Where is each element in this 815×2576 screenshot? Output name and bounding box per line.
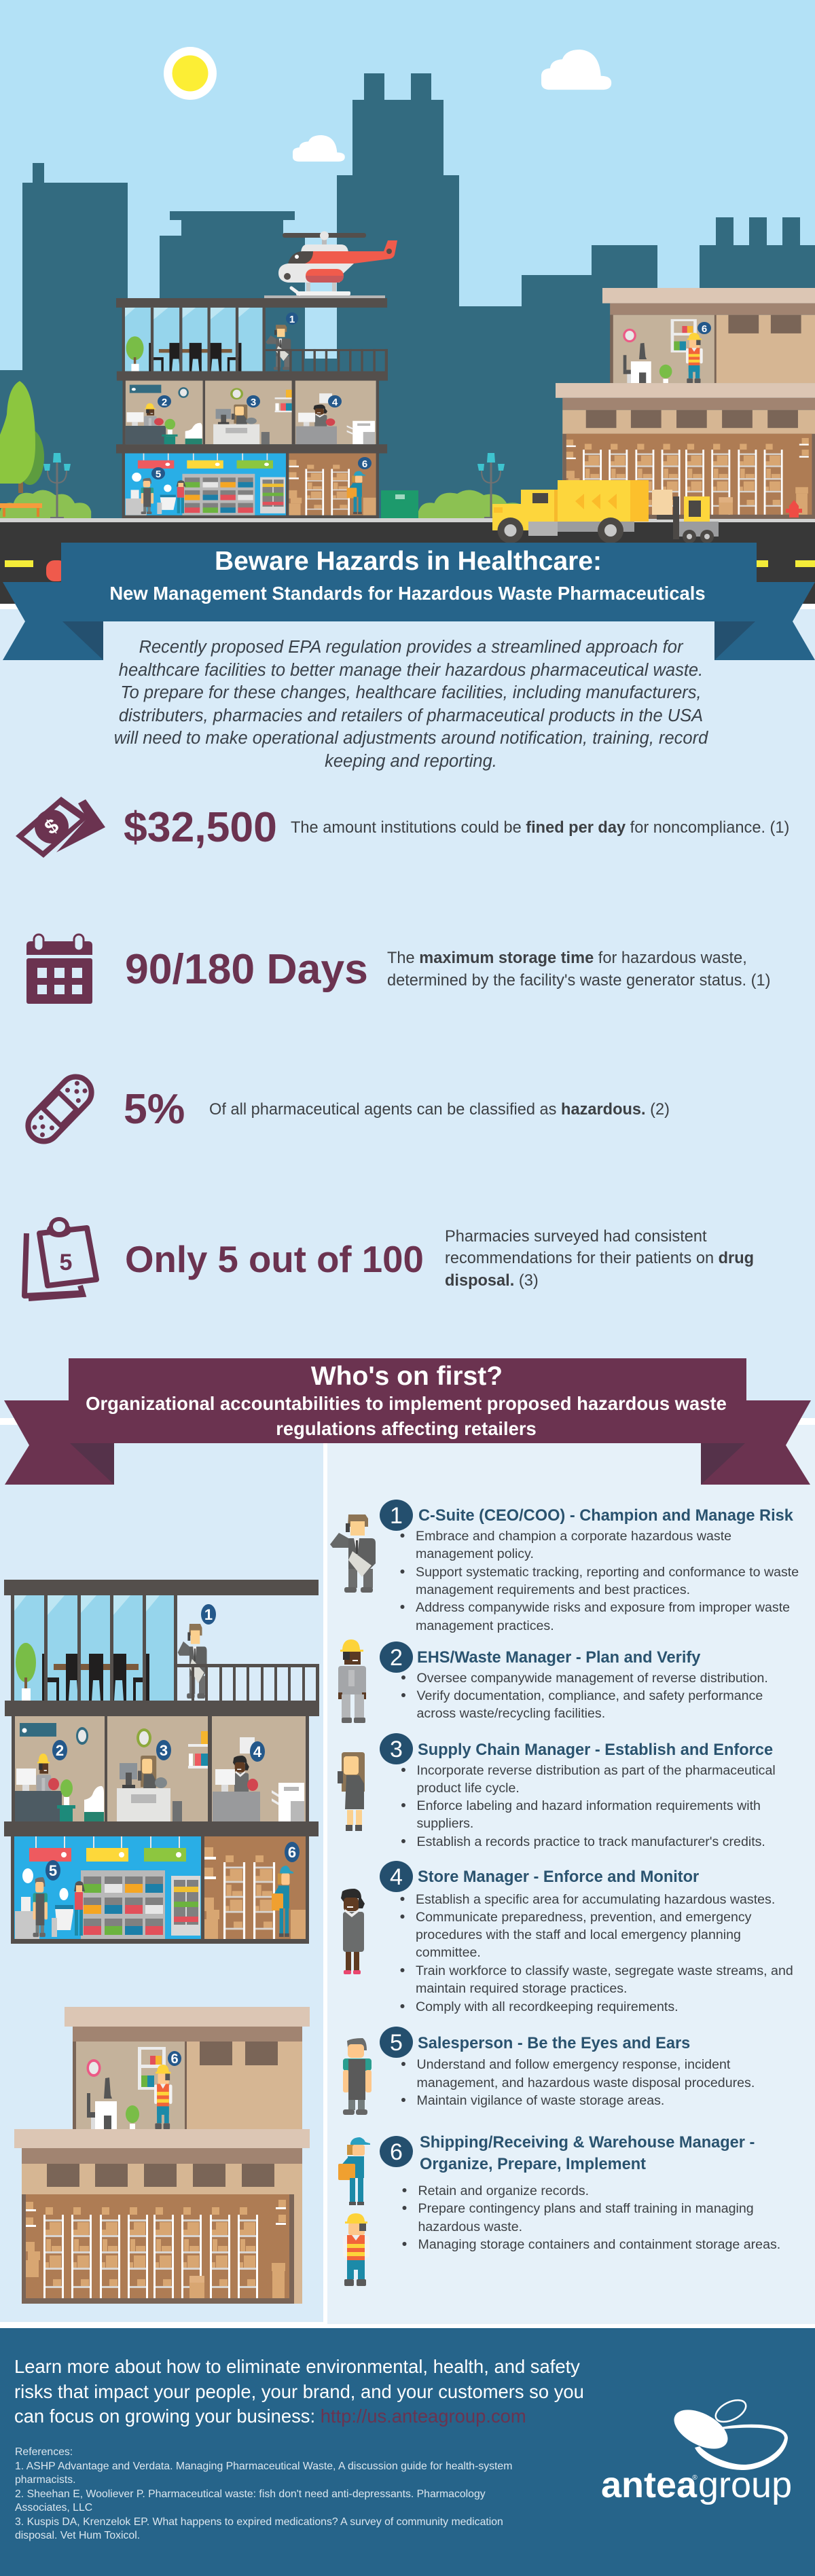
duties: Support systematic tracking, reporting and conformance to waste xyxy=(416,1565,799,1580)
dumpster xyxy=(381,490,418,518)
heading: Supply Chain Manager - Establish and Enforce xyxy=(418,1741,773,1759)
duties: Address companywide risks and exposure from improper waste xyxy=(416,1600,790,1615)
references xyxy=(15,2446,512,2541)
references: 3. Kuspis DA, Krenzelok EP. What happens to expired medications? A survey of community medication xyxy=(15,2516,503,2528)
warehouse number badge xyxy=(168,2051,181,2067)
street lamp right xyxy=(477,453,505,518)
duties: Oversee companywide management of reverse distribution. xyxy=(417,1671,768,1686)
logo: antea group: ® xyxy=(692,2474,698,2482)
heading xyxy=(420,2134,755,2173)
description xyxy=(445,1228,754,1290)
number 2 xyxy=(380,1641,413,1673)
stat: five of one hundred xyxy=(24,1219,754,1299)
value: Only 5 out of 100 xyxy=(125,1239,424,1280)
duties: Establish a specific area for accumulating hazardous wastes. xyxy=(416,1892,775,1907)
duties: Communicate preparedness, prevention, and emergency xyxy=(416,1910,752,1925)
duties: Retain and organize records. xyxy=(418,2183,589,2198)
number 3 xyxy=(380,1733,413,1764)
description: Pharmacies surveyed had consistent xyxy=(445,1228,707,1246)
heading: Organize, Prepare, Implement xyxy=(420,2156,646,2173)
figure: shipping clerk xyxy=(338,2137,370,2205)
number 6: 6 xyxy=(390,2139,403,2165)
delivery truck xyxy=(492,480,649,543)
heading: Salesperson - Be the Eyes and Ears xyxy=(418,2035,690,2052)
figure: woman on phone xyxy=(338,1752,365,1831)
stat: fine per day xyxy=(16,797,789,858)
office number badges xyxy=(46,1604,300,1881)
icon: calendar xyxy=(26,935,92,1004)
description: The maximum storage time for hazardous waste, xyxy=(387,949,747,967)
main title: Beware Hazards in Healthcare: xyxy=(215,547,602,576)
duties: management practices. xyxy=(416,1618,554,1633)
intro paragraph: distributers, pharmacies and retailers of pharmaceutical products in the USA xyxy=(119,706,703,725)
sun xyxy=(164,47,217,100)
map number badges: 6 xyxy=(362,458,367,470)
map number badges: 4 xyxy=(332,397,338,408)
heading: C-Suite (CEO/COO) - Champion and Manage Risk xyxy=(418,1507,794,1525)
logo: antea group: group xyxy=(698,2465,792,2505)
duties: management, and hazardous waste disposal procedures. xyxy=(417,2075,755,2090)
map number badges: 1 xyxy=(289,314,295,325)
duties: management policy. xyxy=(416,1546,534,1561)
bench xyxy=(0,503,42,517)
duties: management requirements and best practices. xyxy=(416,1582,690,1597)
heading: Store Manager - Enforce and Monitor xyxy=(418,1868,699,1886)
cloud small xyxy=(293,135,345,162)
map number badges xyxy=(151,312,711,480)
office number badges: 4 xyxy=(253,1743,262,1760)
role 4: Store Manager xyxy=(341,1861,793,2014)
office building cross-section xyxy=(4,1580,319,1944)
duties: Enforce labeling and hazard information requirements with xyxy=(417,1798,761,1813)
map number badges: 2 xyxy=(162,397,167,408)
references: 2. Sheehan E, Wooliever P. Pharmaceutical waste: fish don't need anti-depressants. Pharmacology xyxy=(15,2488,486,2500)
figure: warehouse worker xyxy=(343,2213,369,2286)
duties xyxy=(401,1671,768,1721)
office number badges: 3 xyxy=(160,1742,168,1759)
duties xyxy=(401,2057,755,2108)
references: Associates, LLC xyxy=(15,2502,92,2514)
duties xyxy=(401,1529,799,1633)
duties: Prepare contingency plans and staff training in managing xyxy=(418,2201,754,2216)
description: disposal. (3) xyxy=(445,1272,539,1290)
references: 1. ASHP Advantage and Verdata. Managing Pharmaceutical Waste, A discussion guide for health-system xyxy=(15,2461,512,2472)
stat: five percent xyxy=(22,1070,670,1148)
map number badges: 6 xyxy=(702,323,707,335)
street lamp left xyxy=(43,453,71,518)
call to action: risks that impact your people, your brand, and your customers so you xyxy=(14,2381,584,2402)
icon: bandage xyxy=(22,1070,98,1148)
bushes left xyxy=(0,490,91,518)
road xyxy=(0,518,815,609)
duties: hazardous waste. xyxy=(418,2219,522,2234)
call to action: Learn more about how to eliminate environmental, health, and safety xyxy=(14,2356,580,2377)
figure: hard hat manager xyxy=(338,1639,366,1723)
duties: Train workforce to classify waste, segregate waste streams, and xyxy=(416,1963,793,1978)
number 5: 5 xyxy=(390,2030,403,2056)
warehouse cross-section xyxy=(14,2007,310,2304)
references: disposal. Vet Hum Toxicol. xyxy=(15,2530,140,2541)
duties: Establish a records practice to track manufacturer's credits. xyxy=(417,1834,765,1849)
call to action xyxy=(14,2356,584,2427)
city skyline xyxy=(0,73,815,518)
role 6: Shipping/Receiving and Warehouse Manager xyxy=(338,2134,780,2286)
logo: antea group xyxy=(601,2396,792,2505)
heading: EHS/Waste Manager - Plan and Verify xyxy=(417,1649,700,1667)
references: pharmacists. xyxy=(15,2474,76,2486)
duties xyxy=(402,2183,780,2252)
references: References: xyxy=(15,2446,73,2458)
icon: pinned notes xyxy=(24,1219,96,1299)
description: The amount institutions could be fined per day for noncompliance. (1) xyxy=(291,819,789,837)
icon: banknotes xyxy=(16,797,105,858)
duties: suppliers. xyxy=(417,1816,473,1831)
intro paragraph: To prepare for these changes, healthcare facilities, including manufacturers, xyxy=(120,683,702,702)
duties: Incorporate reverse distribution as part of the pharmaceutical xyxy=(417,1763,776,1778)
subtitle: New Management Standards for Hazardous Waste Pharmaceuticals xyxy=(109,583,706,604)
office building xyxy=(116,298,388,518)
description xyxy=(387,949,770,990)
number 1: 1 xyxy=(390,1503,403,1529)
intro paragraph: healthcare facilities to better manage their hazardous pharmaceutical waste. xyxy=(119,661,703,680)
number 4 xyxy=(380,1861,413,1892)
intro paragraph xyxy=(114,638,708,771)
sky xyxy=(0,0,815,518)
icon: banknotes: $ xyxy=(41,814,63,839)
number 3: 3 xyxy=(390,1737,403,1762)
duties: Comply with all recordkeeping requirements. xyxy=(416,1999,678,2014)
description: recommendations for their patients on drug xyxy=(445,1250,754,1267)
value: 5% xyxy=(124,1085,185,1133)
duties: Verify documentation, compliance, and safety performance xyxy=(417,1688,763,1703)
map number badges: 5 xyxy=(156,469,161,480)
office number badges: 1 xyxy=(204,1606,213,1623)
intro paragraph: will need to make operational adjustments around notification, training, record xyxy=(114,729,708,748)
map number badges: 3 xyxy=(251,397,256,408)
helicopter xyxy=(264,231,397,298)
warehouse number badge: 6 xyxy=(170,2052,179,2067)
value: 90/180 Days xyxy=(125,945,368,993)
forklift xyxy=(652,490,719,543)
figure: salesperson xyxy=(343,2038,372,2115)
duties xyxy=(401,1763,776,1849)
footer panel xyxy=(0,2328,815,2576)
role 1: C-Suite xyxy=(330,1500,799,1633)
fire hydrant xyxy=(786,500,802,518)
value: $32,500 xyxy=(124,803,277,851)
number 2: 2 xyxy=(390,1645,403,1671)
office number badges: 6 xyxy=(288,1844,296,1861)
number 4: 4 xyxy=(390,1864,403,1890)
description: Of all pharmaceutical agents can be classified as hazardous. (2) xyxy=(209,1101,670,1119)
figure: store manager xyxy=(341,1889,365,1974)
figure: executive xyxy=(330,1514,376,1593)
logo: antea group: antea xyxy=(601,2465,698,2505)
number 5 xyxy=(380,2027,413,2058)
role 3: Supply Chain Manager xyxy=(338,1733,776,1849)
duties: committee. xyxy=(416,1945,481,1960)
call to action: can focus on growing your business: http://us.anteagroup.com xyxy=(14,2406,526,2427)
heading: Shipping/Receiving & Warehouse Manager - xyxy=(420,2134,755,2152)
intro paragraph: Recently proposed EPA regulation provides a streamlined approach for xyxy=(139,638,684,657)
duties: procedures with the staff and local emergency planning xyxy=(416,1927,741,1942)
subheading: regulations affecting retailers xyxy=(276,1418,537,1439)
heading: Who's on first? xyxy=(311,1362,503,1391)
bushes right xyxy=(418,490,526,518)
cloud large xyxy=(541,50,611,90)
intro paragraph: keeping and reporting. xyxy=(325,752,497,771)
section ribbon: who's on first xyxy=(4,1358,811,1485)
role 5: Salesperson xyxy=(343,2027,755,2115)
description: determined by the facility's waste generator status. (1) xyxy=(387,972,770,990)
duties: across waste/recycling facilities. xyxy=(417,1706,605,1721)
duties: Embrace and champion a corporate hazardous waste xyxy=(416,1529,731,1544)
hero illustration: city scene xyxy=(0,0,815,609)
office number badges: 5 xyxy=(49,1862,57,1879)
number 6 xyxy=(380,2136,413,2167)
subheading: Organizational accountabilities to implement proposed hazardous waste xyxy=(86,1393,727,1414)
warehouse building xyxy=(556,288,815,519)
duties: Managing storage containers and containment storage areas. xyxy=(418,2237,780,2252)
role 2: EHS/Waste Manager xyxy=(338,1639,768,1723)
office number badges: 2 xyxy=(56,1742,64,1759)
icon: pinned notes: 5 xyxy=(60,1250,72,1275)
number 1 xyxy=(380,1500,413,1531)
stat: storage days xyxy=(26,935,770,1004)
duties xyxy=(401,1892,793,2014)
duties: maintain required storage practices. xyxy=(416,1981,627,1996)
title ribbon xyxy=(3,543,815,660)
duties: Maintain vigilance of waste storage areas. xyxy=(417,2093,664,2108)
duties: Understand and follow emergency response, incident xyxy=(417,2057,731,2072)
subheading xyxy=(86,1393,727,1439)
duties: product life cycle. xyxy=(417,1781,520,1796)
trees xyxy=(0,381,44,493)
